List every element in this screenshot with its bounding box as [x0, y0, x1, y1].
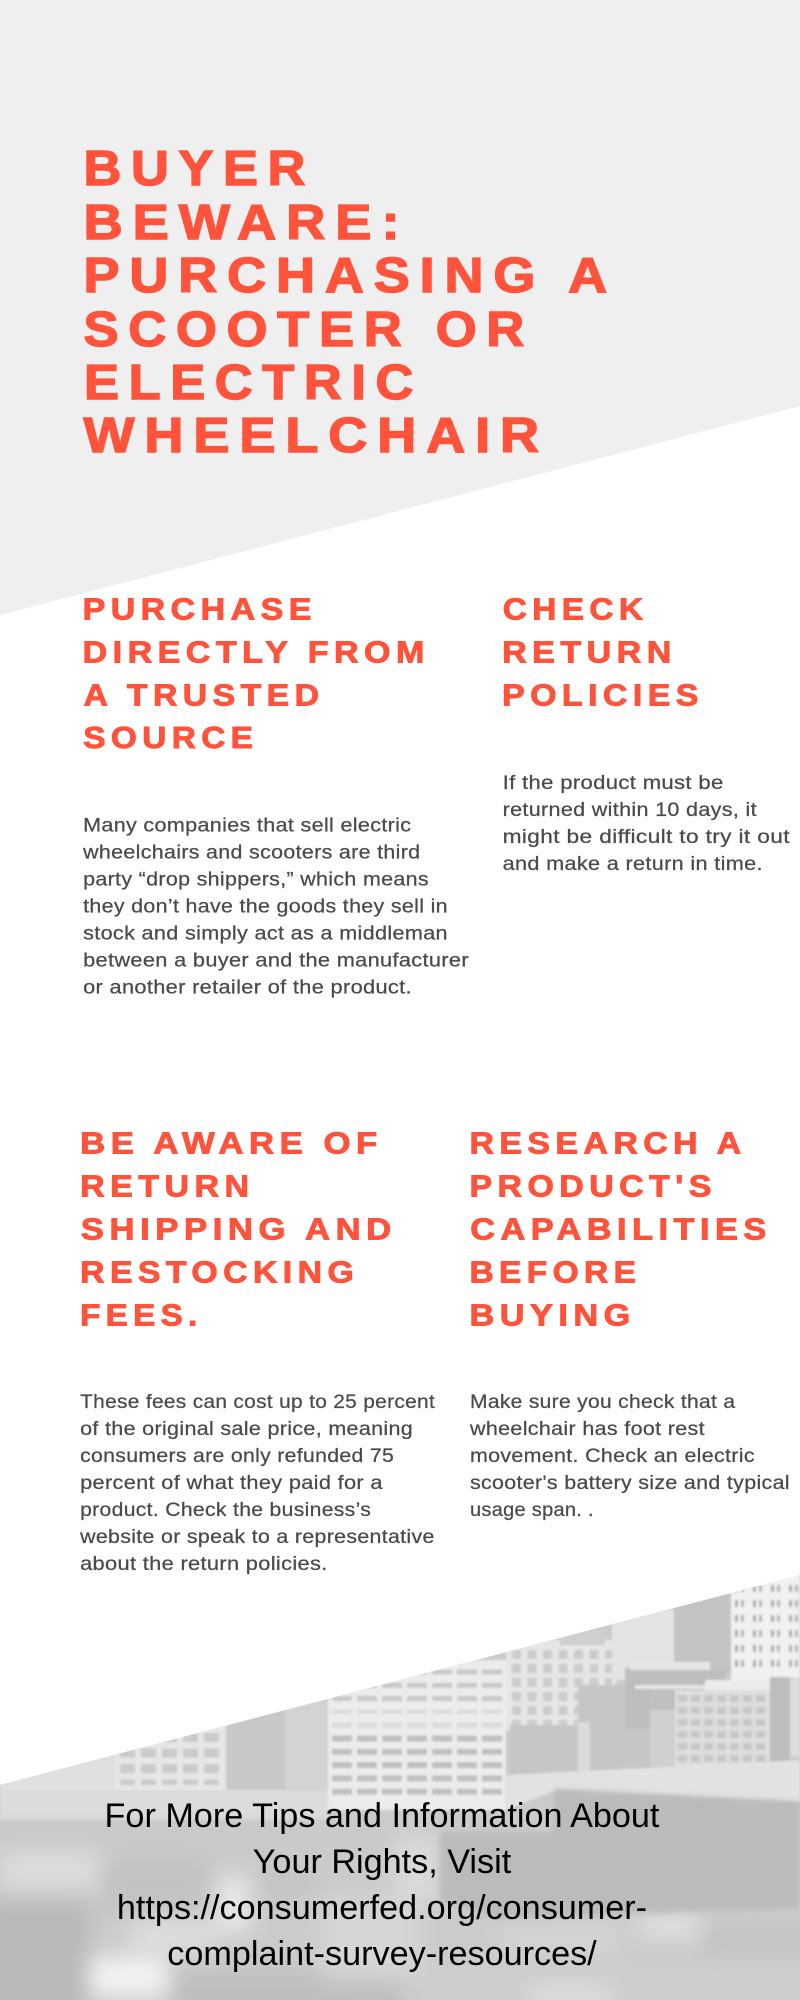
call to action text: complaint-survey-resources/ [167, 1935, 597, 1973]
panel: research a product's capabilities [469, 1126, 790, 1521]
text block: check return policies body: If the product must be [503, 772, 724, 794]
text block: research capabilities body: scooter's battery size and typical [470, 1472, 790, 1494]
heading: check return policies [502, 592, 704, 712]
text block: purchase directly body [82, 814, 469, 998]
text block: research capabilities body: movement. Check an electric [470, 1445, 755, 1467]
text block: purchase directly body: or another retailer of the product. [83, 976, 412, 998]
text block: return shipping fees body: website or speak to a representative [79, 1526, 435, 1548]
heading: return shipping fees: BE AWARE OF [80, 1126, 383, 1160]
heading: purchase directly [83, 592, 430, 755]
panel: check return policies [502, 592, 790, 875]
text block: purchase directly body: stock and simply act as a middleman [83, 922, 448, 944]
heading: return shipping fees: SHIPPING AND [81, 1212, 397, 1246]
title [84, 142, 617, 463]
call to action text: For More Tips and Information About [105, 1797, 660, 1835]
text block: research capabilities body: Make sure you check that a [470, 1391, 735, 1413]
panel: return shipping and restocking fees [79, 1126, 435, 1575]
text block: check return policies body: returned within 10 days, it [503, 799, 757, 821]
title: ELECTRIC [84, 356, 423, 410]
text block: return shipping fees body: of the original sale price, meaning [80, 1418, 413, 1440]
text block: purchase directly body: Many companies that sell electric [83, 814, 411, 836]
title: BUYER [84, 142, 315, 196]
text block: research capabilities body: usage span. . [470, 1499, 594, 1521]
title: BEWARE: [84, 196, 409, 250]
heading: research capabilities: RESEARCH A [470, 1126, 747, 1160]
text block: research capabilities body [469, 1391, 790, 1521]
text block: return shipping fees body: These fees can cost up to 25 percent [80, 1391, 435, 1413]
text block: research capabilities body: wheelchair has foot rest [469, 1418, 705, 1440]
call to action text: https://consumerfed.org/consumer- [117, 1889, 647, 1927]
panel: purchase directly from a trusted source [82, 592, 469, 998]
text block: return shipping fees body: consumers are only refunded 75 [80, 1445, 394, 1467]
text block: return shipping fees body: percent of what they paid for a [80, 1472, 383, 1494]
title: WHEELCHAIR [84, 409, 549, 463]
text block: purchase directly body: they don’t have the goods they sell in [83, 895, 448, 917]
heading: return shipping fees: RESTOCKING [80, 1254, 359, 1290]
heading: research capabilities: CAPABILITIES [470, 1212, 772, 1246]
heading: purchase directly: A TRUSTED [83, 678, 325, 712]
title: PURCHASING A [84, 249, 617, 303]
text block: purchase directly body: wheelchairs and scooters are third [82, 841, 420, 863]
heading: purchase directly: DIRECTLY FROM [83, 634, 430, 670]
heading: research capabilities: BEFORE [470, 1254, 641, 1290]
heading: research capabilities: PRODUCT'S [470, 1168, 717, 1204]
text block: check return policies body: and make a return in time. [503, 853, 763, 875]
heading: check return policies: RETURN [502, 634, 677, 670]
heading: purchase directly: PURCHASE [83, 592, 317, 626]
heading: check return policies: POLICIES [502, 678, 704, 712]
call to action text: Your Rights, Visit [253, 1843, 512, 1881]
heading: return shipping fees: FEES. [80, 1298, 203, 1332]
text block: purchase directly body: party “drop shippers,” which means [83, 868, 429, 890]
heading: return shipping fees: RETURN [80, 1168, 254, 1204]
heading: check return policies: CHECK [503, 592, 648, 626]
heading: research capabilities [470, 1126, 772, 1332]
heading: purchase directly: SOURCE [83, 720, 258, 755]
panel: grey diagonal header [0, 0, 800, 615]
text block: check return policies body [503, 772, 790, 875]
heading: return shipping fees [80, 1126, 397, 1332]
text block: return shipping fees body: product. Check the business’s [80, 1499, 371, 1521]
heading: research capabilities: BUYING [470, 1298, 636, 1332]
text block: check return policies body: might be difficult to try it out [503, 826, 790, 848]
call to action text [105, 1797, 660, 1973]
text block: purchase directly body: between a buyer and the manufacturer [83, 949, 469, 971]
text block: return shipping fees body: about the return policies. [80, 1553, 328, 1575]
text block: return shipping fees body [79, 1391, 435, 1575]
panel: greyscale city skyline image [0, 1565, 800, 2000]
title: SCOOTER OR [84, 303, 534, 357]
